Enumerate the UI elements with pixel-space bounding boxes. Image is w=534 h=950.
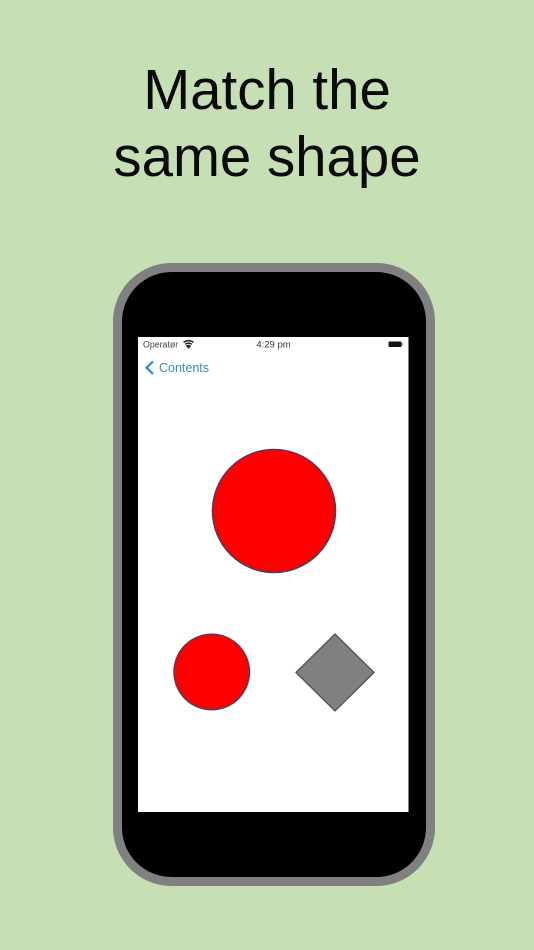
status bar: time: 4:29 pm bbox=[256, 340, 291, 350]
gray diamond bbox=[296, 634, 374, 711]
icon: battery bbox=[388, 342, 403, 347]
title: Match the bbox=[143, 58, 391, 121]
phone screen bbox=[138, 337, 408, 812]
title bbox=[113, 58, 421, 188]
icon: wifi bbox=[184, 341, 194, 348]
title: same shape bbox=[113, 125, 421, 188]
small red circle bbox=[174, 634, 249, 710]
phone body bbox=[118, 268, 430, 882]
back link: Contents bbox=[159, 361, 209, 375]
large red circle bbox=[212, 450, 336, 572]
status bar: carrier: Operatør bbox=[143, 340, 178, 350]
icon: back chevron bbox=[146, 362, 153, 374]
